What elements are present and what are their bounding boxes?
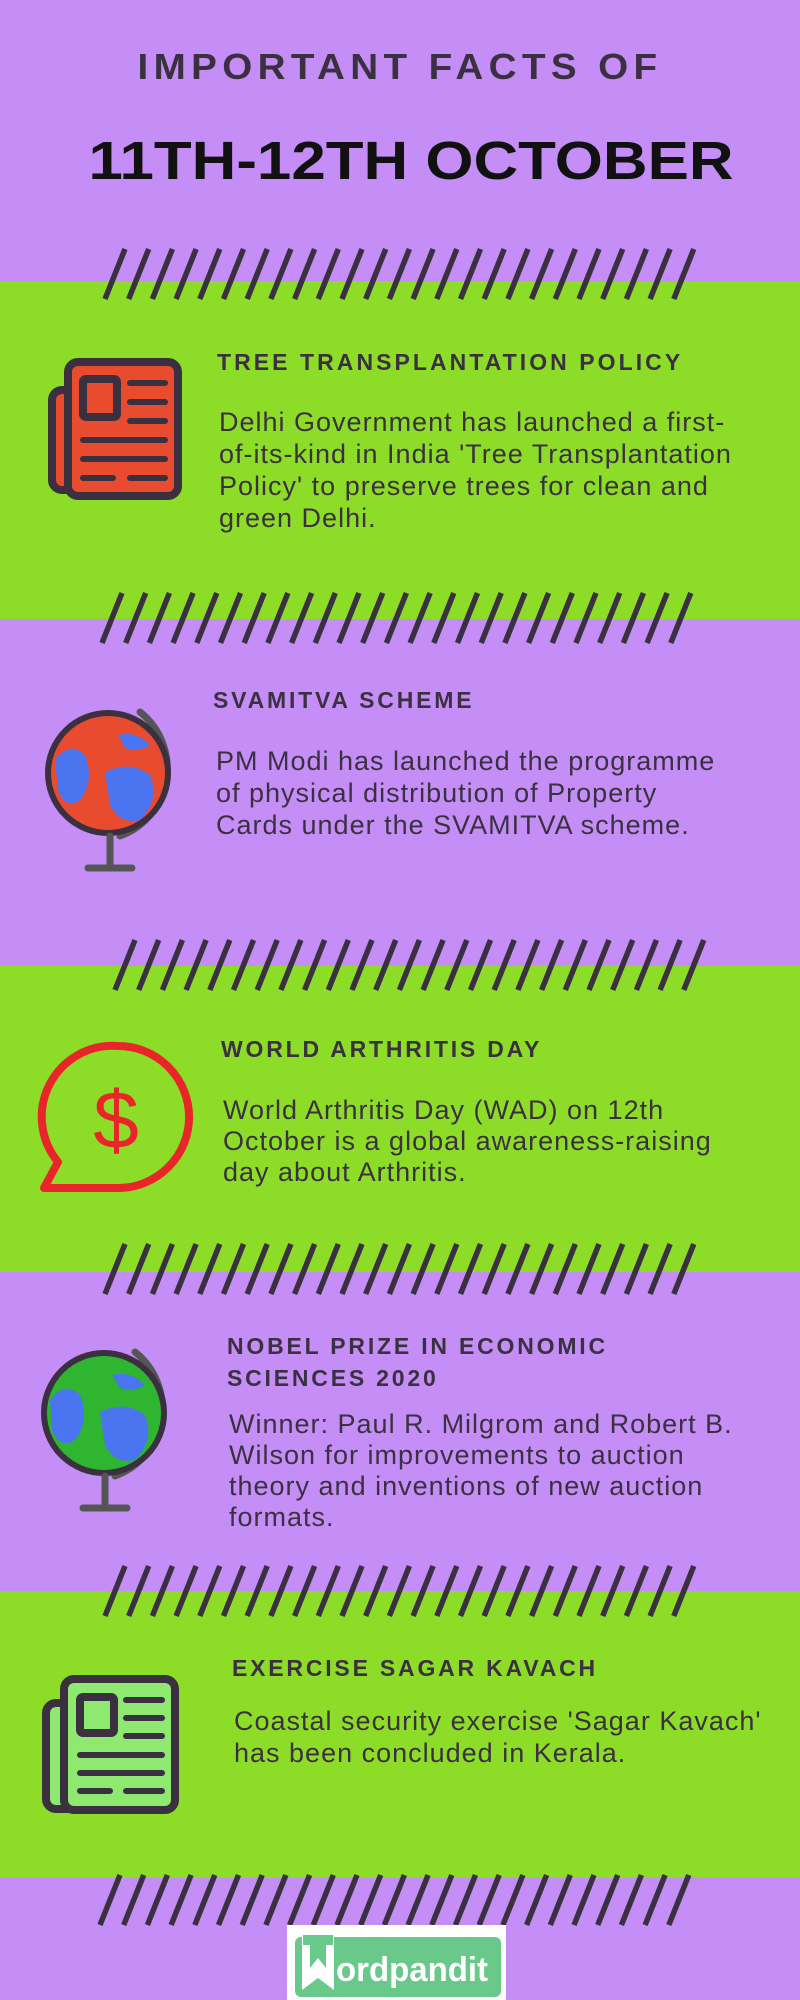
- background: header: [0, 0, 800, 281]
- text 2: [216, 746, 715, 840]
- heading 4: [227, 1333, 608, 1391]
- logo: wordpandit: ordpandit: [336, 1951, 488, 1989]
- icon: globe red: [48, 712, 168, 868]
- text 4: Wilson for improvements to auction: [229, 1440, 685, 1470]
- text 1: green Delhi.: [219, 503, 377, 533]
- text 4: [229, 1409, 733, 1532]
- background: section 3: [0, 966, 800, 1272]
- heading 3: WORLD ARTHRITIS DAY: [221, 1036, 542, 1062]
- background: section 2: [0, 619, 800, 966]
- title: 11TH-12TH OCTOBER: [88, 131, 734, 191]
- background: section 4: [0, 1272, 800, 1591]
- background: section 5: [0, 1591, 800, 1878]
- text 2: PM Modi has launched the programme: [216, 746, 715, 776]
- text 2: of physical distribution of Property: [216, 778, 657, 808]
- title: [88, 46, 734, 191]
- slash divider 2: [102, 593, 691, 643]
- text 4: formats.: [229, 1502, 335, 1532]
- text 3: October is a global awareness-raising: [223, 1126, 712, 1156]
- text 1: Delhi Government has launched a first-: [219, 407, 725, 437]
- text 5: has been concluded in Kerala.: [234, 1738, 626, 1768]
- text 4: Winner: Paul R. Milgrom and Robert B.: [229, 1409, 733, 1439]
- heading 2: SVAMITVA SCHEME: [213, 687, 474, 713]
- icon: dollar speech bubble: $: [93, 1075, 139, 1166]
- text 2: Cards under the SVAMITVA scheme.: [216, 810, 690, 840]
- icon: globe green: [44, 1352, 164, 1508]
- logo: wordpandit: [287, 1925, 506, 2000]
- background: footer: [0, 1878, 800, 2000]
- slash divider 6: [100, 1875, 689, 1925]
- text 1: [219, 407, 732, 533]
- text 3: day about Arthritis.: [223, 1157, 467, 1187]
- text 4: theory and inventions of new auction: [229, 1471, 703, 1501]
- text 3: [223, 1095, 712, 1187]
- slash divider 3: [115, 940, 704, 990]
- slash divider 1: [105, 249, 694, 299]
- icon: newspaper green: [46, 1679, 175, 1810]
- heading 1: TREE TRANSPLANTATION POLICY: [217, 349, 683, 375]
- heading 4: SCIENCES 2020: [227, 1365, 439, 1391]
- text 5: [234, 1706, 762, 1768]
- background: section 1: [0, 281, 800, 619]
- text 1: of-its-kind in India 'Tree Transplantation: [219, 439, 732, 469]
- heading 4: NOBEL PRIZE IN ECONOMIC: [227, 1333, 608, 1359]
- slash divider 5: [105, 1566, 694, 1616]
- heading 5: EXERCISE SAGAR KAVACH: [232, 1655, 598, 1681]
- icon: newspaper red: [52, 362, 178, 496]
- icon: dollar speech bubble: [42, 1046, 189, 1188]
- title: IMPORTANT FACTS OF: [138, 46, 662, 87]
- text 1: Policy' to preserve trees for clean and: [219, 471, 709, 501]
- text 5: Coastal security exercise 'Sagar Kavach': [234, 1706, 762, 1736]
- text 3: World Arthritis Day (WAD) on 12th: [223, 1095, 664, 1125]
- slash divider 4: [105, 1244, 694, 1294]
